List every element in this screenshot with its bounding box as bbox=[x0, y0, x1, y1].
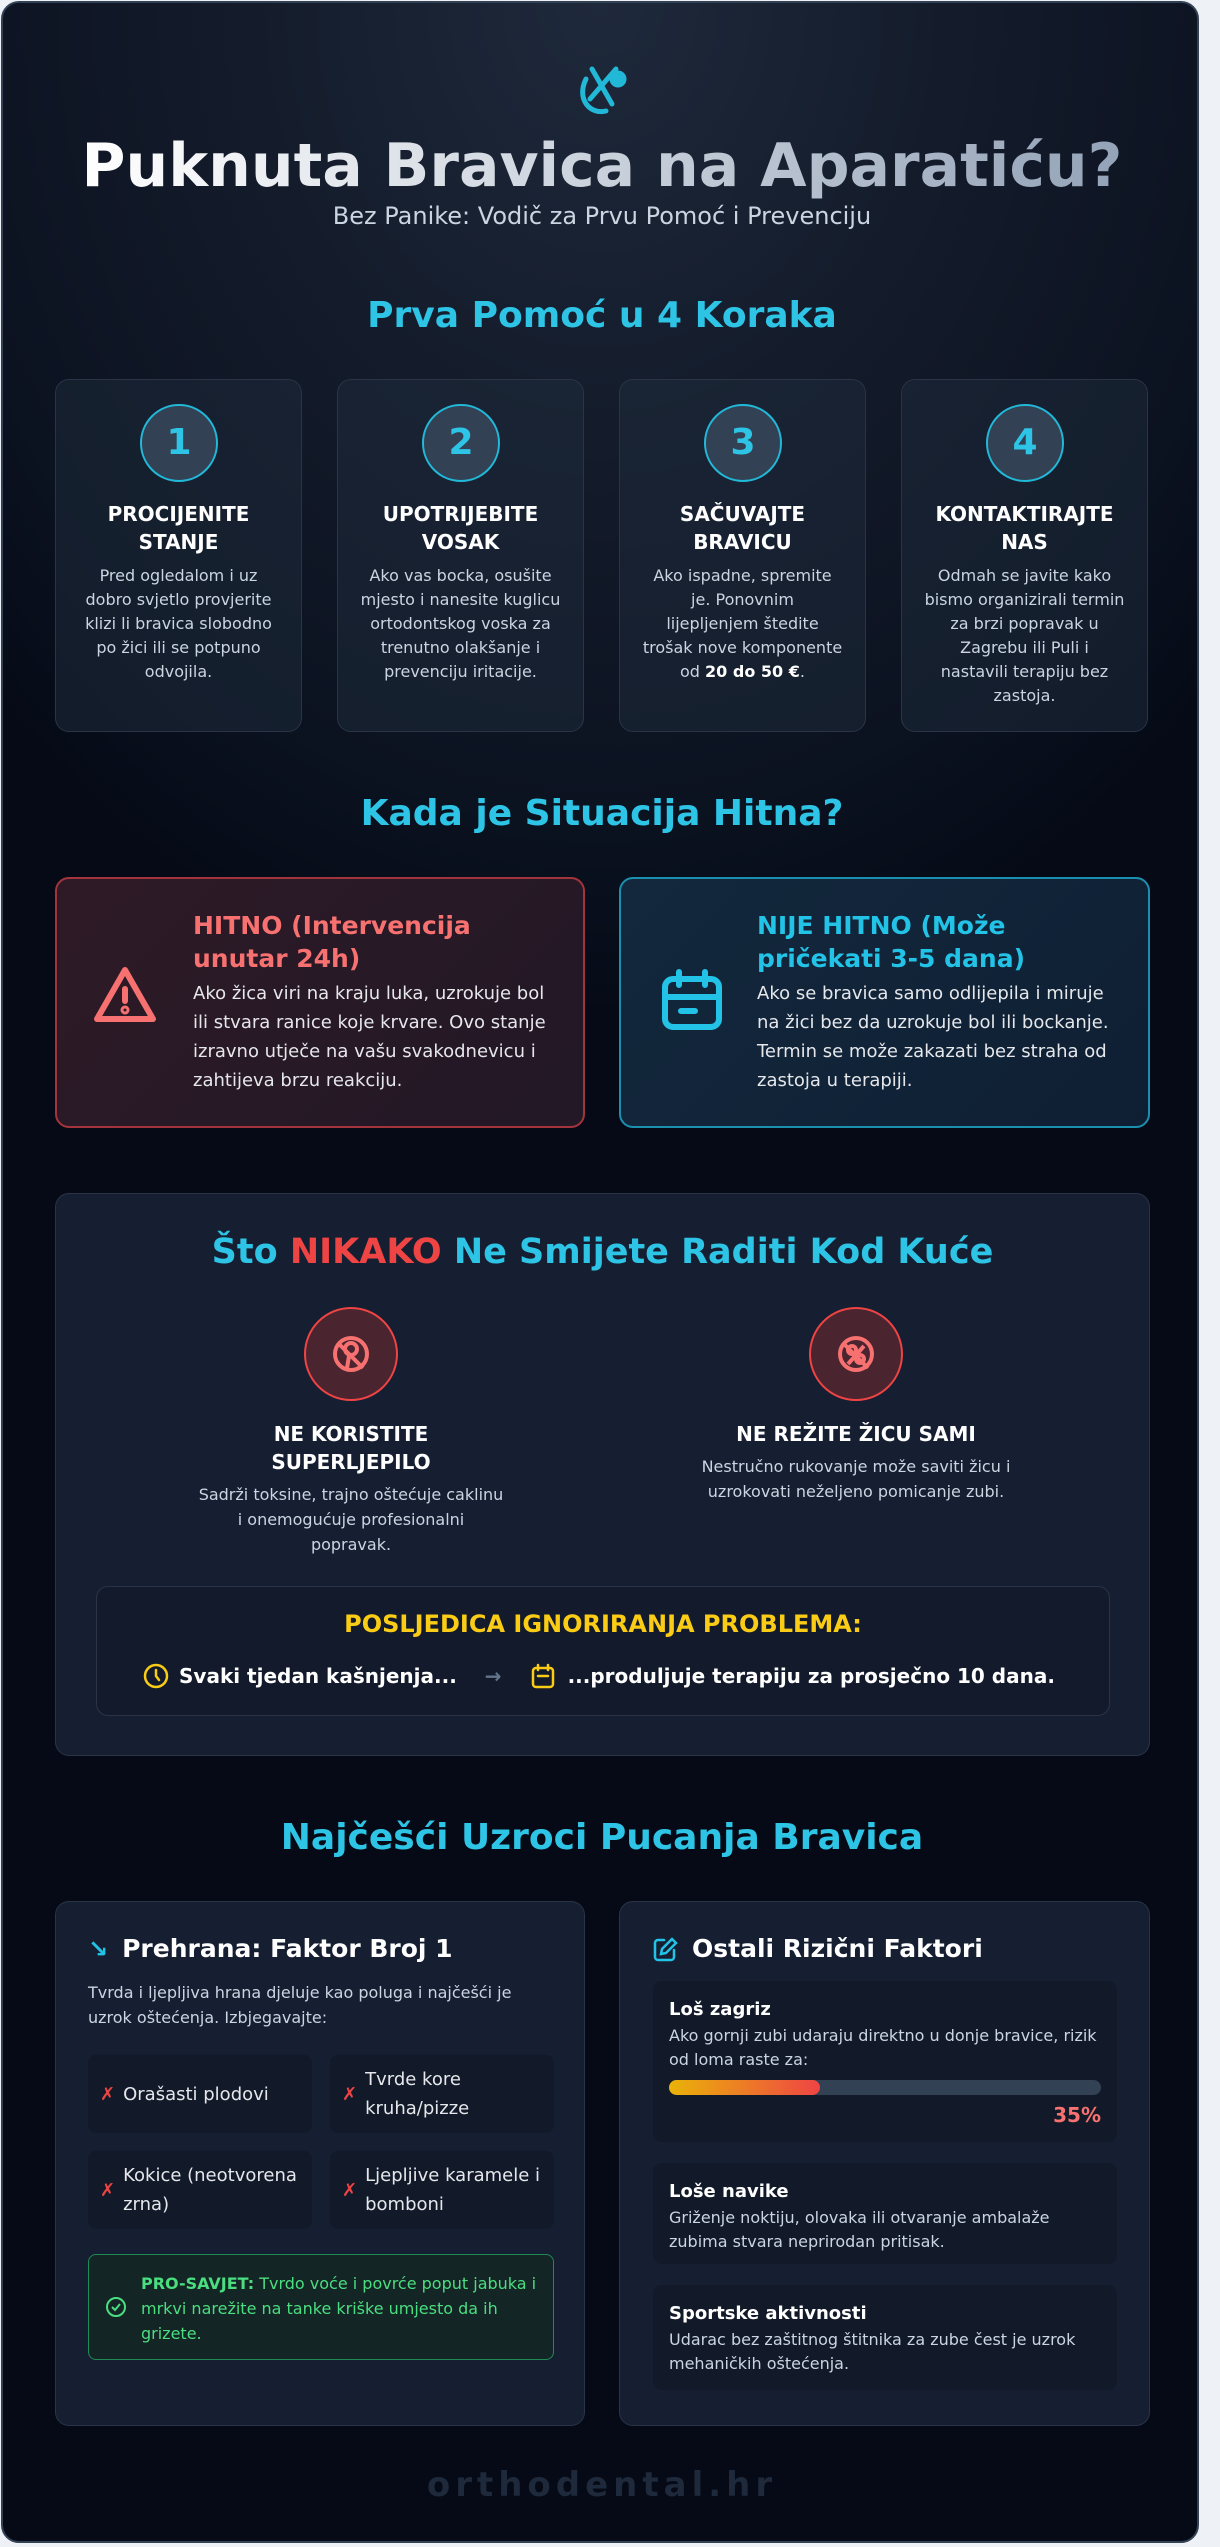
step 3: je. Ponovnim bbox=[691, 590, 794, 609]
step 1: Pred ogledalom i uz dobro svjetlo provjerite klizi li bravica slobodno po žici ili se potpuno odvojila. bbox=[85, 566, 272, 681]
panel: never do at home bbox=[55, 1193, 1150, 1756]
title: Puknuta Bravica na Aparatiću? bbox=[82, 131, 1122, 201]
item: do not cut bbox=[702, 1307, 1010, 1501]
step 3: BRAVICU bbox=[693, 530, 792, 554]
panel: diet bbox=[55, 1901, 585, 2426]
risk: sport: Udarac bez zaštitnog štitnika za zube čest je uzrok mehaničkih oštećenja. bbox=[669, 2330, 1075, 2373]
icon: warning bbox=[94, 967, 156, 1022]
item: crusts: kruha/pizze bbox=[365, 2098, 469, 2119]
risk: habits: Griženje noktiju, olovaka ili otvaranje ambalaže zubima stvara neprirodan pritisak. bbox=[669, 2208, 1050, 2251]
step 4: za brzi popravak u bbox=[950, 614, 1099, 633]
step 4: NAS bbox=[1001, 530, 1048, 554]
step 2: VOSAK bbox=[422, 530, 499, 554]
item: crusts bbox=[330, 2055, 554, 2133]
panel heading: diet: Prehrana: Faktor Broj 1 bbox=[122, 1934, 453, 1963]
panel: other risks bbox=[619, 1901, 1150, 2426]
risk: sport: Sportske aktivnosti bbox=[669, 2303, 867, 2324]
step 4: 4 bbox=[1012, 422, 1038, 463]
item: crusts: ✗ bbox=[342, 2084, 357, 2104]
step 2: UPOTRIJEBITE bbox=[383, 502, 538, 526]
progress bar bbox=[669, 2080, 1101, 2095]
urgent text bbox=[193, 911, 546, 1091]
item: popcorn: zrna) bbox=[123, 2194, 169, 2215]
item: do not cut: Nestručno rukovanje može saviti žicu i uzrokovati neželjeno pomicanje zubi. bbox=[702, 1457, 1010, 1501]
heading: first aid: Prva Pomoć u 4 Koraka bbox=[367, 295, 837, 336]
step 3: SAČUVAJTE bbox=[680, 502, 805, 526]
item: caramels: bomboni bbox=[365, 2194, 444, 2215]
panel heading: diet: ↘ bbox=[88, 1934, 108, 1962]
step 1: STANJE bbox=[139, 530, 218, 554]
callout: consequence bbox=[96, 1586, 1110, 1716]
urgent text: Ako žica viri na kraju luka, uzrokuje bol ili stvara ranice koje krvare. Ovo stanje izravno utječe na vašu svakodnevicu i zahtijeva brzu reakciju. bbox=[193, 983, 546, 1091]
risk: bad bite: Ako gornji zubi udaraju direktno u donje bravice, rizik od loma raste za: bbox=[669, 2026, 1097, 2069]
item: superglue: NE KORISTITE bbox=[274, 1422, 428, 1446]
subtitle: Bez Panike: Vodič za Prvu Pomoć i Prevenciju bbox=[333, 202, 871, 230]
item: caramels: ✗ bbox=[342, 2180, 357, 2200]
step 3: lijepljenjem štedite bbox=[666, 614, 819, 633]
not urgent text bbox=[756, 911, 1109, 1091]
panel heading: risks: Ostali Rizični Faktori bbox=[692, 1934, 983, 1963]
callout: consequence: Svaki tjedan kašnjenja... bbox=[179, 1664, 457, 1688]
item: nuts bbox=[88, 2055, 312, 2133]
step 3: Ako ispadne, spremite bbox=[653, 566, 832, 585]
item: nuts: ✗ bbox=[100, 2084, 115, 2104]
step 4: KONTAKTIRAJTE bbox=[935, 502, 1114, 526]
panel: not urgent bbox=[619, 877, 1150, 1128]
risk: bad bite: 35% bbox=[1053, 2103, 1101, 2127]
step 4: Zagrebu ili Puli i bbox=[960, 638, 1089, 657]
icon: broken bracket bbox=[580, 66, 626, 114]
item: popcorn: ✗ bbox=[100, 2180, 115, 2200]
step 4 bbox=[901, 379, 1148, 732]
heading: Što NIKAKO Ne Smijete Raditi Kod Kuće bbox=[212, 1232, 993, 1272]
heading: urgency: Kada je Situacija Hitna? bbox=[361, 793, 843, 834]
item: popcorn bbox=[88, 2151, 312, 2229]
step 2: 2 bbox=[448, 422, 474, 463]
item: superglue bbox=[199, 1307, 503, 1554]
item: superglue: Sadrži toksine, trajno oštećuje caklinu i onemogućuje profesionalni popravak. bbox=[199, 1485, 503, 1554]
not urgent text: Ako se bravica samo odlijepila i miruje na žici bez da uzrokuje bol ili bockanje. Termin se može zakazati bez straha od zastoja u terapiji. bbox=[757, 983, 1109, 1091]
footer: orthodental.hr bbox=[427, 2465, 777, 2505]
item: popcorn: Kokice (neotvorena bbox=[123, 2165, 297, 2186]
heading: causes: Najčešći Uzroci Pucanja Bravica bbox=[281, 1817, 923, 1858]
item: superglue: SUPERLJEPILO bbox=[271, 1450, 431, 1474]
step 3: od 20 do 50 €. bbox=[680, 662, 805, 681]
risk: habits: Loše navike bbox=[669, 2181, 789, 2202]
callout: consequence: → bbox=[485, 1664, 502, 1688]
item: do not cut: NE REŽITE ŽICU SAMI bbox=[736, 1422, 976, 1446]
callout: consequence: POSLJEDICA IGNORIRANJA PROBLEMA: bbox=[344, 1610, 862, 1638]
step 4: zastoja. bbox=[994, 686, 1055, 705]
step 4: Odmah se javite kako bbox=[938, 566, 1111, 585]
not urgent text: NIJE HITNO (Može pričekati 3-5 dana) bbox=[757, 911, 1025, 973]
callout: pro tip bbox=[88, 2254, 554, 2360]
step 2: Ako vas bocka, osušite mjesto i nanesite kuglicu ortodontskog voska za trenutno olakšanje i prevenciju iritacije. bbox=[361, 566, 560, 681]
panel: urgent bbox=[55, 877, 585, 1128]
item: caramels bbox=[330, 2151, 554, 2229]
risk: bad bite: Loš zagriz bbox=[669, 1999, 771, 2020]
risk: bad bite bbox=[653, 1981, 1117, 2142]
step 2 bbox=[337, 379, 584, 732]
step 4: bismo organizirali termin bbox=[925, 590, 1124, 609]
step 3: 3 bbox=[730, 422, 756, 463]
step 1 bbox=[55, 379, 302, 732]
icon: calendar bbox=[662, 969, 722, 1030]
item: crusts: Tvrde kore bbox=[365, 2069, 461, 2090]
risk: habits bbox=[653, 2163, 1117, 2264]
risk: sport bbox=[653, 2285, 1117, 2390]
item: caramels: Ljepljive karamele i bbox=[365, 2165, 540, 2186]
item: nuts: Orašasti plodovi bbox=[123, 2084, 269, 2104]
callout: consequence: ...produljuje terapiju za prosječno 10 dana. bbox=[568, 1664, 1055, 1688]
step 1: 1 bbox=[166, 422, 192, 463]
urgent text: HITNO (Intervencija unutar 24h) bbox=[193, 911, 471, 973]
step 1: PROCIJENITE bbox=[108, 502, 249, 526]
diet text: Tvrda i ljepljiva hrana djeluje kao poluga i najčešći je uzrok oštećenja. Izbjegavajte: bbox=[88, 1983, 511, 2027]
step 3 bbox=[619, 379, 866, 732]
callout: pro tip: PRO-SAVJET: Tvrdo voće i povrće poput jabuka i mrkvi narežite na tanke kriške umjesto da ih grizete. bbox=[141, 2274, 536, 2343]
step 3: trošak nove komponente bbox=[643, 638, 842, 657]
icon: no cutting bbox=[809, 1307, 903, 1401]
step 4: nastavili terapiju bez bbox=[941, 662, 1108, 681]
icon: no glue bbox=[304, 1307, 398, 1401]
